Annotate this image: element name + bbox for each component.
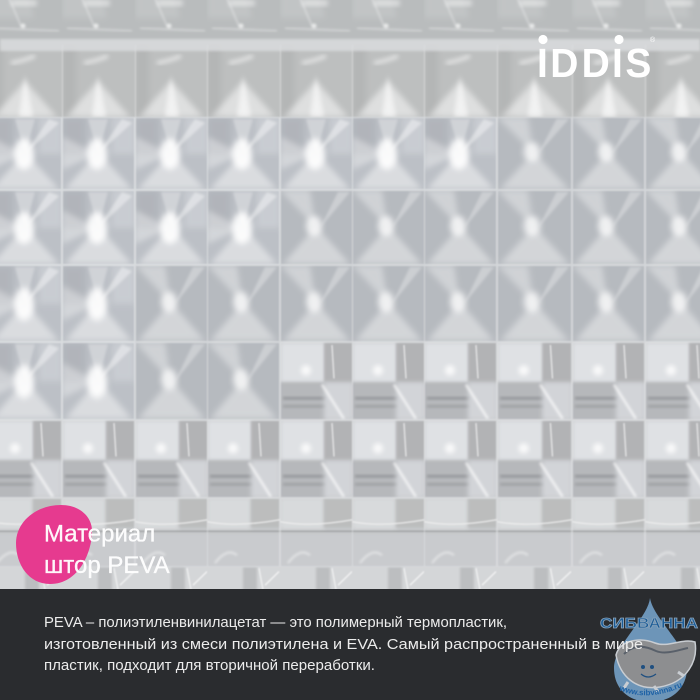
description text: изготовленный из смеси полиэтилена и EVA. Самый распространенный в мире	[44, 636, 643, 653]
heading: Материал штор PEVA: Материал	[44, 520, 155, 548]
description text: PEVA – полиэтиленвинилацетат — это полимерный термопластик,	[44, 614, 507, 631]
dark description panel	[0, 589, 700, 700]
badge: pink blob with heading	[16, 505, 170, 584]
logo: IDDIS: ®	[650, 36, 656, 44]
logo: IDDIS: IDDIS	[537, 41, 651, 86]
description text: пластик, подходит для вторичной переработки.	[44, 657, 375, 674]
watermark: СИБВАННА logo	[600, 598, 698, 700]
icon: water drop	[614, 598, 687, 700]
description text	[44, 614, 643, 674]
heading: Материал штор PEVA: штор PEVA	[44, 552, 170, 579]
pink blob	[16, 505, 92, 584]
brand name: СИБВАННА	[600, 615, 698, 632]
website: www.sibvanna.ru	[620, 683, 682, 696]
icon: bathtub	[616, 640, 696, 692]
